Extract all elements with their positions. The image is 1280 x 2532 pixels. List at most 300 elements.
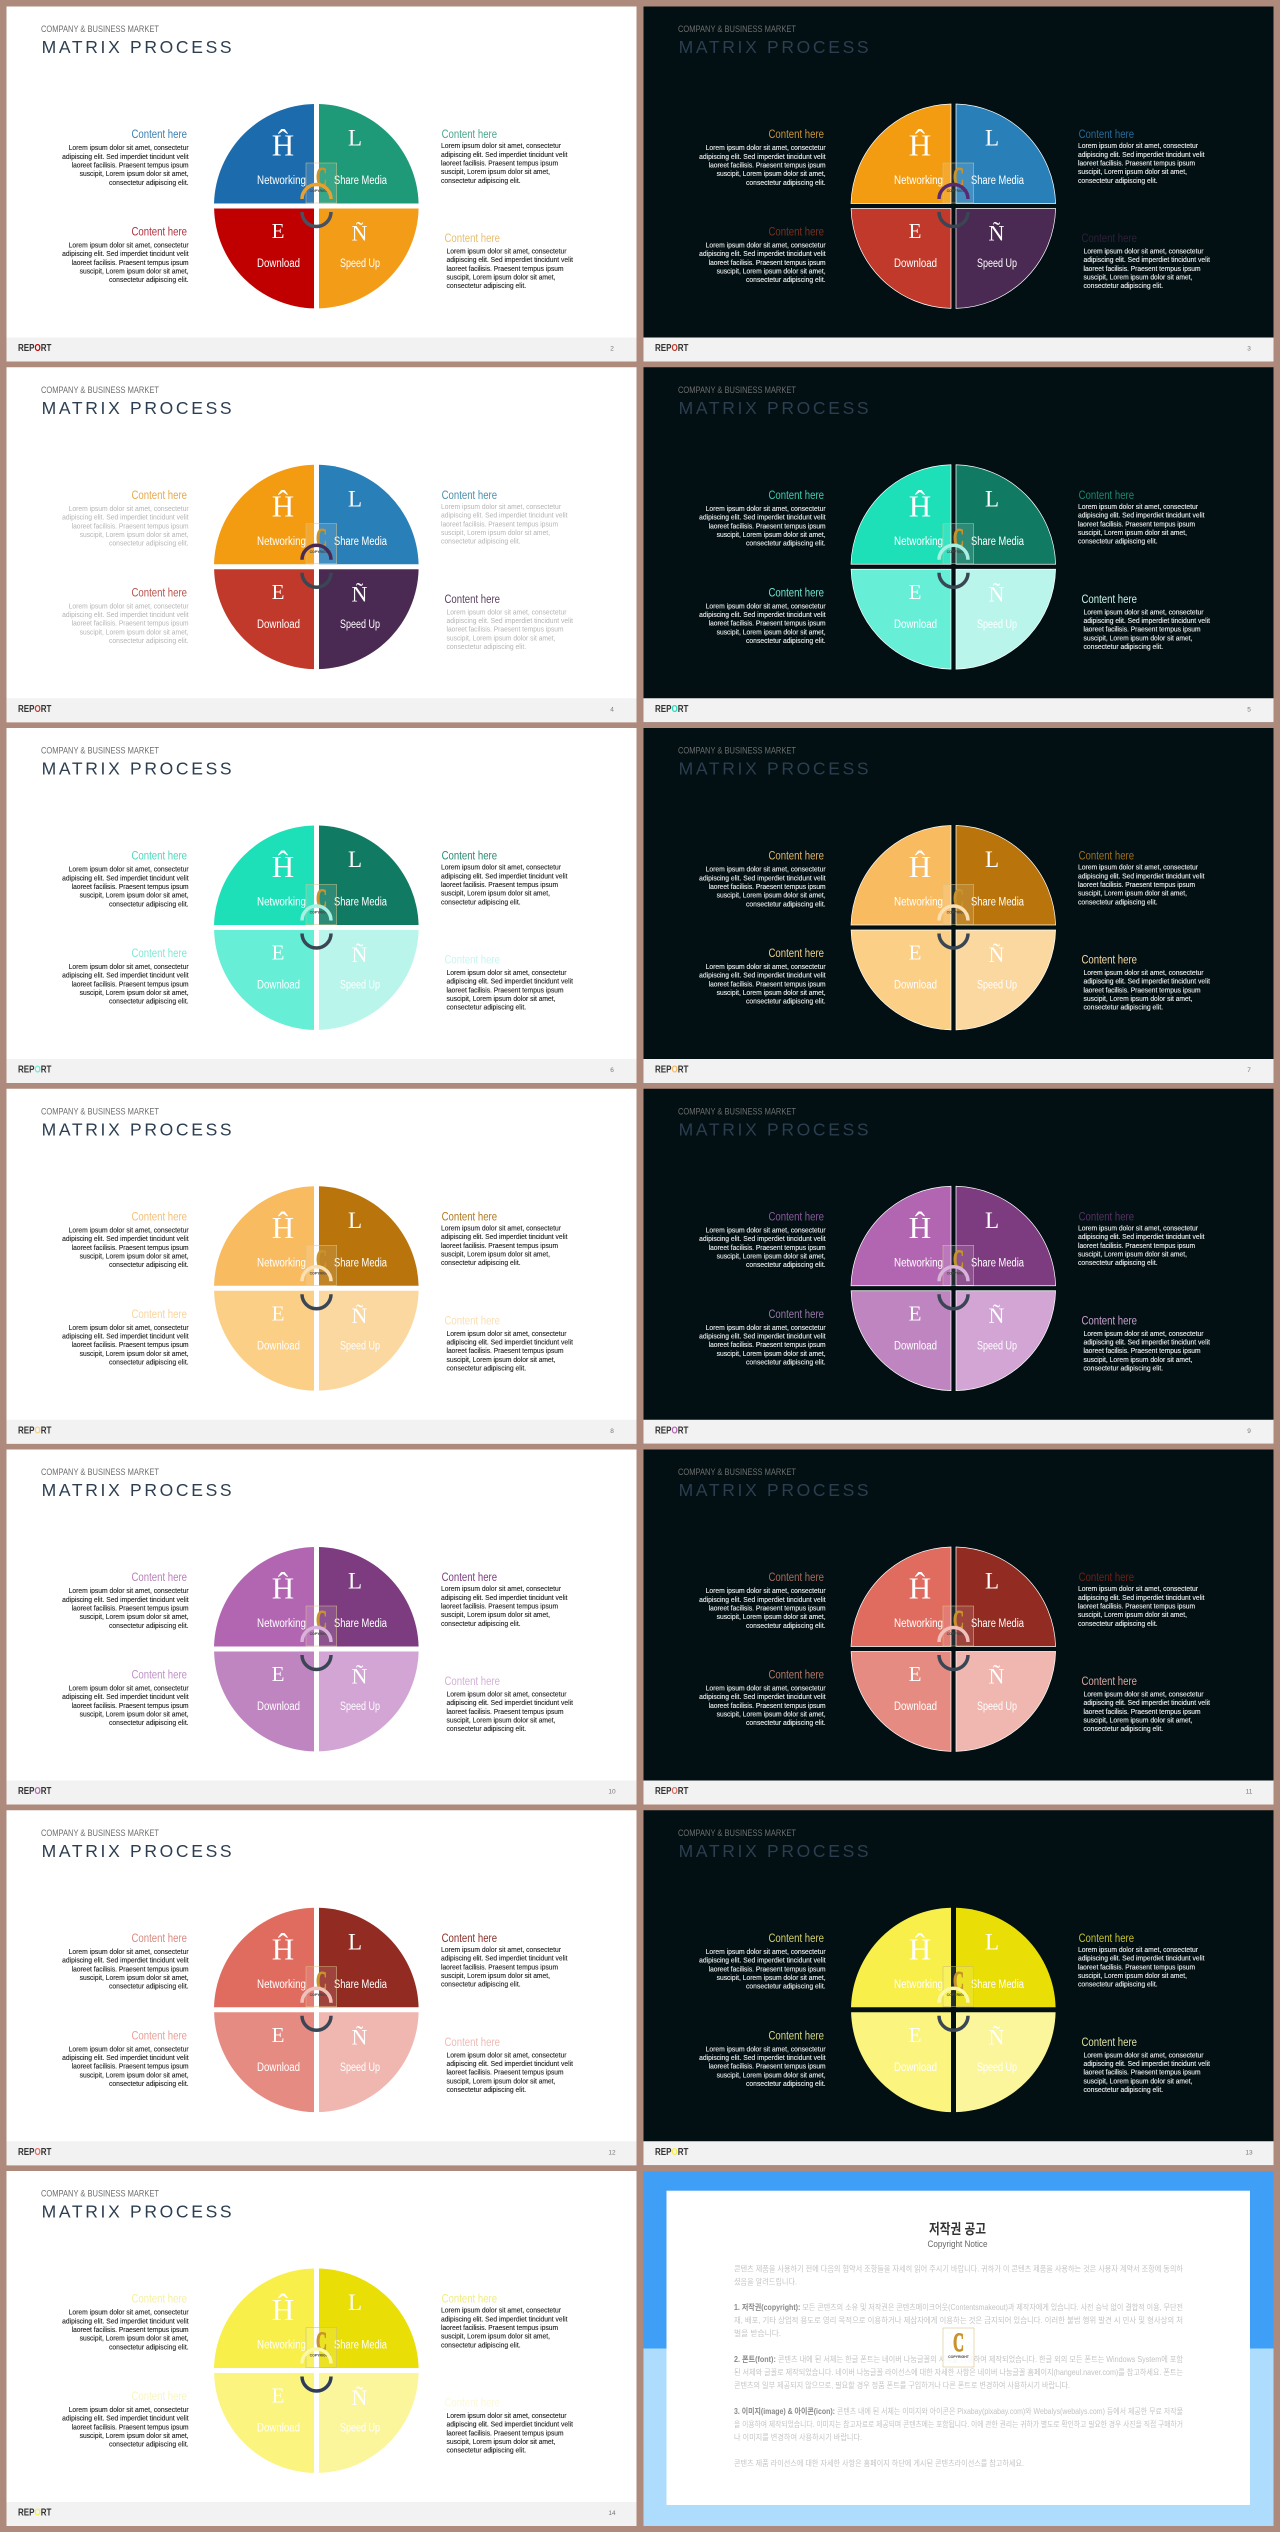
subtitle: COMPANY & BUSINESS MARKET [41,1467,159,1478]
notice body text: 1. 저작권(copyright): 모든 콘텐츠의 소유 및 저작권은 콘텐츠메이크어웃(Contentsmakeout)과 제작자에게 있습니다. 사전 승낙 없이 결합적 이용, 무단전 [734,2302,1183,2312]
slide 4: light, orange blue red purple [6,367,636,722]
text block: bottom left: consectetur adipiscing elit. [746,275,826,284]
logo with arcs [302,1605,337,1670]
page number: 5 [1247,706,1251,713]
text block: bottom right: adipiscing elit. Sed imperdiet tincidunt velit [1084,977,1211,986]
text block: bottom right: Content here [1082,2037,1137,2049]
text block: bottom right: Lorem ipsum dolor sit amet, consectetur [446,968,567,977]
slide background [6,367,636,722]
matrix circle: E [272,2023,284,2047]
white notice card [666,2191,1250,2505]
text block: bottom left: consectetur adipiscing elit. [746,1357,826,1366]
slide background [6,1450,636,1804]
logo with arcs: COPYRIGHT [310,550,331,554]
matrix circle: E [272,219,284,243]
matrix circle: Download [894,1340,937,1352]
matrix circle: Share Media [971,896,1024,908]
slide 14: light, yellow [6,2171,636,2526]
matrix circle: E [272,1301,284,1325]
logo with arcs: C [953,1966,964,1995]
text block: top left: suscipit, Lorem ipsum dolor sit amet, [717,1612,826,1621]
text block: top right: Content here [1079,1933,1134,1945]
matrix circle: L [985,486,999,511]
slide background [644,1089,1274,1444]
text block: top right [441,2294,568,2349]
text block: top right: adipiscing elit. Sed imperdiet tincidunt velit [1078,1232,1205,1241]
text block: top left [62,490,189,548]
text block: bottom left: consectetur adipiscing elit. [109,2079,189,2088]
slide background [644,367,1274,722]
text block: bottom left: adipiscing elit. Sed imperdiet tincidunt velit [62,249,189,258]
text block: bottom right: Content here [1082,594,1137,606]
text block: bottom right: Lorem ipsum dolor sit amet, consectetur [1084,968,1204,977]
page number: 4 [610,706,614,713]
text block: bottom right: adipiscing elit. Sed imperdiet tincidunt velit [446,977,574,986]
matrix circle: Ĥ [909,849,931,884]
matrix circle: Share Media [334,175,387,187]
slide 2: light, blue green red orange [6,6,636,362]
text block: top left: consectetur adipiscing elit. [746,1260,826,1269]
matrix circle: Speed Up [340,2422,380,2434]
matrix circle: L [348,1208,362,1233]
matrix circle: Speed Up [340,980,380,992]
footer label: REPORT [655,2146,689,2158]
slide background [6,2171,636,2526]
text block: bottom right [1082,2037,1211,2094]
footer label: REPORT [18,1064,52,1076]
text block: bottom left: adipiscing elit. Sed imperdiet tincidunt velit [62,2414,189,2423]
matrix circle: Ĥ [909,488,931,523]
text block: top left: Content here [768,129,824,141]
text block: top left: adipiscing elit. Sed imperdiet tincidunt velit [62,873,189,882]
title: MATRIX PROCESS [42,1119,232,1139]
text block: top right: Content here [1079,1572,1134,1584]
text block: top left: adipiscing elit. Sed imperdiet tincidunt velit [62,1956,189,1965]
text block: top right: laoreet facilisis. Praesent tempus ipsum [1078,1241,1195,1250]
matrix circle: Speed Up [340,2062,380,2074]
logo with arcs: C [316,1244,327,1274]
text block: bottom left: suscipit, Lorem ipsum dolor sit amet, [80,1349,189,1358]
text block: top left: consectetur adipiscing elit. [109,2342,189,2351]
text block: bottom right: laoreet facilisis. Praesent tempus ipsum [1084,264,1200,273]
text block: top right [1078,1211,1205,1267]
text block: bottom left: adipiscing elit. Sed imperdiet tincidunt velit [699,971,826,980]
text block: bottom left: adipiscing elit. Sed imperdiet tincidunt velit [62,610,189,619]
text block: bottom left: consectetur adipiscing elit. [109,2440,189,2449]
text block: bottom right: Content here [444,2398,500,2410]
matrix circle: Networking [894,1618,943,1630]
text block: bottom left: Lorem ipsum dolor sit amet, consectetur [706,1323,826,1332]
matrix circle: Ĥ [272,1931,294,1966]
matrix circle: E [272,2384,284,2408]
footer bar [6,338,636,362]
text block: bottom left: suscipit, Lorem ipsum dolor sit amet, [717,627,826,636]
text block: bottom left: adipiscing elit. Sed imperdiet tincidunt velit [699,1331,826,1340]
footer label: REPORT [655,1424,689,1436]
text block: bottom left: suscipit, Lorem ipsum dolor sit amet, [80,1710,189,1718]
matrix circle: Download [894,2062,937,2074]
matrix circle: L [985,1929,999,1954]
logo with arcs: COPYRIGHT [947,1632,968,1636]
text block: bottom right: Lorem ipsum dolor sit amet, consectetur [446,607,567,616]
matrix circle: Download [894,980,937,992]
text block: bottom left [62,948,189,1006]
matrix circle: Networking [257,896,306,908]
text block: top right: suscipit, Lorem ipsum dolor sit amet, [1078,889,1187,898]
logo [943,2328,974,2367]
text block: top right: laoreet facilisis. Praesent tempus ipsum [441,1602,558,1610]
text block: top left: adipiscing elit. Sed imperdiet tincidunt velit [699,1595,826,1604]
text block: bottom left: Content here [132,226,187,238]
matrix circle: Speed Up [340,258,380,270]
text block: top left: adipiscing elit. Sed imperdiet tincidunt velit [62,1595,189,1604]
matrix circle: Download [257,1701,300,1713]
matrix circle: Networking [257,1257,306,1269]
text block: bottom left: laoreet facilisis. Praesent tempus ipsum [72,619,189,628]
text block: bottom left: adipiscing elit. Sed imperdiet tincidunt velit [699,2053,826,2062]
text block: bottom left: laoreet facilisis. Praesent tempus ipsum [709,979,826,988]
text block: top right: adipiscing elit. Sed imperdiet tincidunt velit [441,2314,568,2323]
text block: bottom left: Content here [768,2030,824,2042]
text block: top left: suscipit, Lorem ipsum dolor sit amet, [80,1251,189,1260]
logo with arcs: COPYRIGHT [947,189,968,193]
subtitle: COMPANY & BUSINESS MARKET [41,746,159,756]
matrix circle [214,465,419,669]
subtitle: COMPANY & BUSINESS MARKET [41,385,159,396]
matrix circle: Download [257,2422,300,2434]
text block: top left: laoreet facilisis. Praesent tempus ipsum [709,160,826,170]
text block: bottom left: suscipit, Lorem ipsum dolor sit amet, [717,266,826,276]
page number: 2 [610,346,614,352]
logo with arcs: COPYRIGHT [947,550,968,554]
matrix circle: Networking [894,536,943,548]
text block: bottom right [1082,954,1211,1012]
text block: bottom right: Content here [1082,1676,1137,1688]
text block: bottom left: suscipit, Lorem ipsum dolor sit amet, [717,1710,826,1718]
footer bar [644,338,1274,362]
text block: bottom left: consectetur adipiscing elit. [109,997,189,1006]
text block: bottom right: Lorem ipsum dolor sit amet, consectetur [1084,1690,1204,1698]
page number: 6 [610,1067,614,1074]
logo with arcs [939,884,974,948]
text block: top right: suscipit, Lorem ipsum dolor sit amet, [1078,528,1187,537]
matrix circle: Share Media [971,1618,1024,1630]
text block: top right: adipiscing elit. Sed imperdiet tincidunt velit [441,871,568,880]
logo with arcs: C [316,1966,327,1995]
text block: bottom right: consectetur adipiscing elit. [1084,1724,1163,1733]
text block: top left: consectetur adipiscing elit. [746,1621,826,1630]
text block: bottom right: laoreet facilisis. Praesent tempus ipsum [446,264,564,273]
matrix circle: Share Media [971,536,1024,548]
text block: top left: suscipit, Lorem ipsum dolor sit amet, [717,1973,826,1982]
matrix circle: Speed Up [340,619,380,631]
text block: bottom left: adipiscing elit. Sed imperdiet tincidunt velit [699,610,826,619]
logo with arcs [302,162,337,226]
text block: bottom right: laoreet facilisis. Praesent tempus ipsum [1084,985,1200,994]
text block: bottom right: suscipit, Lorem ipsum dolor sit amet, [446,1716,556,1724]
text block: bottom right [444,1676,574,1733]
page number: 7 [1247,1067,1251,1074]
matrix circle [851,1908,1056,2112]
slide 9: dark, purple [644,1089,1274,1444]
matrix circle: Share Media [334,1979,387,1991]
text block: top right: Lorem ipsum dolor sit amet, consectetur [1078,1945,1198,1954]
text block: top right [1078,850,1205,906]
text block: top left: Content here [768,1572,824,1584]
text block: bottom right: Content here [444,954,500,966]
matrix circle: Share Media [334,2340,387,2352]
footer label: REPORT [655,342,689,354]
text block: bottom right: consectetur adipiscing elit. [1084,1003,1163,1012]
text block: top left: Lorem ipsum dolor sit amet, consectetur [706,1225,826,1234]
matrix circle: Download [894,619,937,631]
text block: top right: consectetur adipiscing elit. [441,176,521,185]
matrix circle [214,826,419,1030]
background lower light blue [644,2348,1274,2526]
matrix circle: Share Media [971,1257,1024,1269]
footer label: REPORT [655,1064,689,1076]
logo with arcs: C [316,884,327,913]
text block: bottom right: Content here [444,2037,500,2049]
footer bar [644,698,1274,722]
text block: top left: laoreet facilisis. Praesent tempus ipsum [72,882,189,891]
text block: bottom right: suscipit, Lorem ipsum dolor sit amet, [446,994,556,1003]
matrix circle: E [272,1662,284,1686]
title: MATRIX PROCESS [42,2202,232,2222]
matrix circle: Ĥ [272,2292,294,2327]
text block: top left: adipiscing elit. Sed imperdiet tincidunt velit [699,152,826,161]
text block: bottom left: Lorem ipsum dolor sit amet, consectetur [69,2044,189,2053]
text block: top left: Content here [132,1211,187,1223]
matrix circle: E [272,580,284,604]
text block: top left [699,490,826,548]
matrix circle [851,465,1056,669]
logo with arcs [302,2327,337,2391]
matrix circle: Download [257,619,300,631]
text block: bottom left [62,2391,189,2449]
matrix circle: Download [257,258,300,270]
logo with arcs: COPYRIGHT [310,1993,331,1997]
slide background [644,1810,1274,2165]
matrix circle: L [985,847,999,872]
text block: top left: Lorem ipsum dolor sit amet, consectetur [69,1947,189,1956]
logo with arcs [939,162,974,226]
text block: bottom right: consectetur adipiscing elit. [446,2085,526,2094]
matrix circle: L [985,126,999,151]
matrix circle [214,104,419,308]
text block: bottom left: Content here [132,1309,187,1321]
footer bar [6,698,636,722]
text block: top left: consectetur adipiscing elit. [109,1982,189,1991]
title: MATRIX PROCESS [679,758,869,778]
text block: bottom right: adipiscing elit. Sed imperdiet tincidunt velit [446,2059,574,2068]
text block: bottom right [1082,1676,1211,1733]
text block: bottom right: suscipit, Lorem ipsum dolor sit amet, [446,1355,556,1364]
text block: bottom left: adipiscing elit. Sed imperdiet tincidunt velit [699,249,826,258]
text block: bottom right: laoreet facilisis. Praesent tempus ipsum [446,1346,564,1355]
matrix circle: E [909,1301,921,1325]
text block: bottom right: consectetur adipiscing elit. [1084,281,1163,290]
text block: bottom left: laoreet facilisis. Praesent tempus ipsum [72,2422,189,2431]
text block: bottom right: consectetur adipiscing elit. [1084,2085,1163,2094]
footer label: REPORT [655,703,689,715]
text block: bottom right: Lorem ipsum dolor sit amet, consectetur [446,2411,567,2420]
footer label: REPORT [18,342,52,354]
text block: top right: Lorem ipsum dolor sit amet, consectetur [441,2306,561,2315]
logo with arcs [939,523,974,587]
text block: bottom right: suscipit, Lorem ipsum dolor sit amet, [1084,1355,1192,1364]
text block: top right: Lorem ipsum dolor sit amet, consectetur [441,1223,561,1232]
text block: top right: Lorem ipsum dolor sit amet, consectetur [441,141,561,150]
text block: top right: Lorem ipsum dolor sit amet, consectetur [1078,863,1198,872]
matrix circle: Share Media [334,896,387,908]
slide 10: light, purple [6,1450,636,1804]
title: MATRIX PROCESS [42,1480,232,1500]
text block: bottom left: consectetur adipiscing elit. [109,1718,189,1727]
slide background [6,1810,636,2165]
text block: bottom left: Content here [768,1670,824,1682]
text block: top left: Content here [132,2294,187,2306]
matrix circle [851,826,1056,1030]
logo with arcs: C [953,884,964,913]
text block: top left: Content here [768,490,824,502]
text block: bottom right: laoreet facilisis. Praesent tempus ipsum [446,625,564,634]
logo with arcs: COPYRIGHT [310,1271,331,1275]
text block: top right: Content here [442,129,497,141]
notice body text: 콘텐츠 제품을 사용하기 전에 다음의 협약서 조항들을 자세히 읽어 주시기 바랍니다. 귀하가 이 콘텐츠 제품을 사용하는 것은 사용자 계약서 조항에 동의하 [734,2264,1184,2274]
text block: top left: Content here [768,1933,824,1945]
logo with arcs: C [316,523,327,552]
logo with arcs: C [953,1244,964,1274]
text block: top left: Content here [132,1572,187,1584]
logo with arcs [302,884,337,948]
footer label: REPORT [655,1785,689,1797]
text block: top right: Content here [442,850,497,862]
text block: top right: adipiscing elit. Sed imperdiet tincidunt velit [441,511,568,520]
text block: top left: laoreet facilisis. Praesent tempus ipsum [709,1964,826,1973]
text block: top left: adipiscing elit. Sed imperdiet tincidunt velit [62,2316,189,2325]
slide 3: dark, orange blue red purple [644,6,1274,362]
matrix circle: Networking [894,896,943,908]
matrix circle: E [909,940,921,964]
text block: top left [62,1572,189,1630]
text block: bottom right: consectetur adipiscing elit. [446,1363,526,1372]
notice body text: 나 이미지를 변경하여 사용하시기 바랍니다. [734,2432,862,2442]
matrix circle: Networking [894,1979,943,1991]
footer bar [6,1780,636,1804]
logo with arcs: COPYRIGHT [947,910,968,914]
logo with arcs: C [953,1605,964,1635]
title: MATRIX PROCESS [679,1119,869,1139]
logo with arcs [939,1966,974,2030]
text block: top right: consectetur adipiscing elit. [1078,1980,1158,1989]
text block: bottom right: suscipit, Lorem ipsum dolor sit amet, [446,633,556,642]
text block: top right: consectetur adipiscing elit. [1078,1258,1158,1267]
text block: bottom left: suscipit, Lorem ipsum dolor sit amet, [717,1349,826,1358]
text block: bottom right: Lorem ipsum dolor sit amet, consectetur [1084,1329,1204,1338]
matrix circle [214,2268,419,2473]
text block: bottom right: adipiscing elit. Sed imperdiet tincidunt velit [446,1698,574,1707]
text block: bottom left: Lorem ipsum dolor sit amet, consectetur [706,1684,826,1692]
text block: top left: adipiscing elit. Sed imperdiet tincidunt velit [699,1234,826,1243]
text block: top right [441,1572,568,1628]
logo with arcs [939,1244,974,1309]
text block: bottom right: Content here [1082,954,1137,966]
text block: top right: consectetur adipiscing elit. [441,897,521,906]
footer bar [644,1780,1274,1804]
text block: bottom left: Lorem ipsum dolor sit amet, consectetur [69,2405,189,2414]
text block: bottom right: consectetur adipiscing elit. [1084,642,1163,651]
text block: bottom right: Lorem ipsum dolor sit amet, consectetur [446,2050,567,2059]
text block: top left: Lorem ipsum dolor sit amet, consectetur [706,504,826,513]
matrix circle [851,1547,1056,1751]
notice title: 저작권 공고 [929,2221,986,2237]
text block: top left: adipiscing elit. Sed imperdiet tincidunt velit [62,1234,189,1243]
text block: top left: Content here [768,850,824,862]
text block: top left: Content here [768,1211,824,1223]
text block: bottom right: adipiscing elit. Sed imperdiet tincidunt velit [1084,1698,1211,1707]
text block: bottom right: Lorem ipsum dolor sit amet, consectetur [1084,2050,1204,2059]
footer bar [644,1059,1274,1083]
slide 6: light, teal [6,728,636,1083]
text block: bottom left: adipiscing elit. Sed imperdiet tincidunt velit [699,1692,826,1701]
page number: 8 [610,1428,614,1435]
text block: top left: Lorem ipsum dolor sit amet, consectetur [706,1586,826,1595]
text block: top right: consectetur adipiscing elit. [1078,176,1158,185]
text block: bottom right: Content here [1082,1315,1137,1327]
text block: bottom left: laoreet facilisis. Praesent tempus ipsum [72,258,189,267]
text block: top left: laoreet facilisis. Praesent tempus ipsum [709,1243,826,1252]
text block: top right: consectetur adipiscing elit. [1078,537,1158,546]
footer bar [6,2141,636,2165]
text block: top right: consectetur adipiscing elit. [1078,1619,1158,1628]
text block: bottom left: suscipit, Lorem ipsum dolor sit amet, [717,988,826,997]
matrix circle: Networking [894,1257,943,1269]
slide 12: light, red [6,1810,636,2165]
text block: bottom right [1082,233,1211,290]
text block: bottom left [699,226,826,284]
matrix circle: Share Media [334,1618,387,1630]
text block: bottom right: adipiscing elit. Sed imperdiet tincidunt velit [446,1337,574,1346]
text block: bottom right: Content here [444,1676,500,1688]
text block: bottom right: suscipit, Lorem ipsum dolor sit amet, [1084,633,1192,642]
matrix circle: L [348,126,362,151]
subtitle: COMPANY & BUSINESS MARKET [678,24,796,35]
text block: bottom left: Lorem ipsum dolor sit amet, consectetur [706,601,826,610]
matrix circle: Networking [257,175,306,187]
subtitle: COMPANY & BUSINESS MARKET [678,1106,796,1117]
text block: bottom right: laoreet facilisis. Praesent tempus ipsum [446,2068,564,2077]
text block: top right [1078,490,1205,546]
text block: bottom left: suscipit, Lorem ipsum dolor sit amet, [80,627,189,636]
text block: top left [699,1211,826,1269]
text block: top left [699,129,826,187]
matrix circle: Ĥ [272,1210,294,1245]
matrix circle: Speed Up [340,1701,380,1713]
text block: top left: Lorem ipsum dolor sit amet, consectetur [706,1947,826,1956]
text block: top right: laoreet facilisis. Praesent tempus ipsum [1078,1602,1195,1610]
logo with arcs: C [316,2327,327,2356]
text block: top right: laoreet facilisis. Praesent tempus ipsum [1078,519,1195,528]
text block: top right: suscipit, Lorem ipsum dolor sit amet, [1078,1971,1187,1980]
logo with arcs [302,523,337,587]
text block: bottom left: consectetur adipiscing elit. [109,275,189,284]
text block: bottom right: adipiscing elit. Sed imperdiet tincidunt velit [446,2420,574,2429]
text block: top right: Content here [1079,850,1134,862]
text block: top left: Lorem ipsum dolor sit amet, consectetur [69,865,189,874]
logo with arcs [302,1966,337,2030]
text block: bottom right [444,2398,574,2455]
